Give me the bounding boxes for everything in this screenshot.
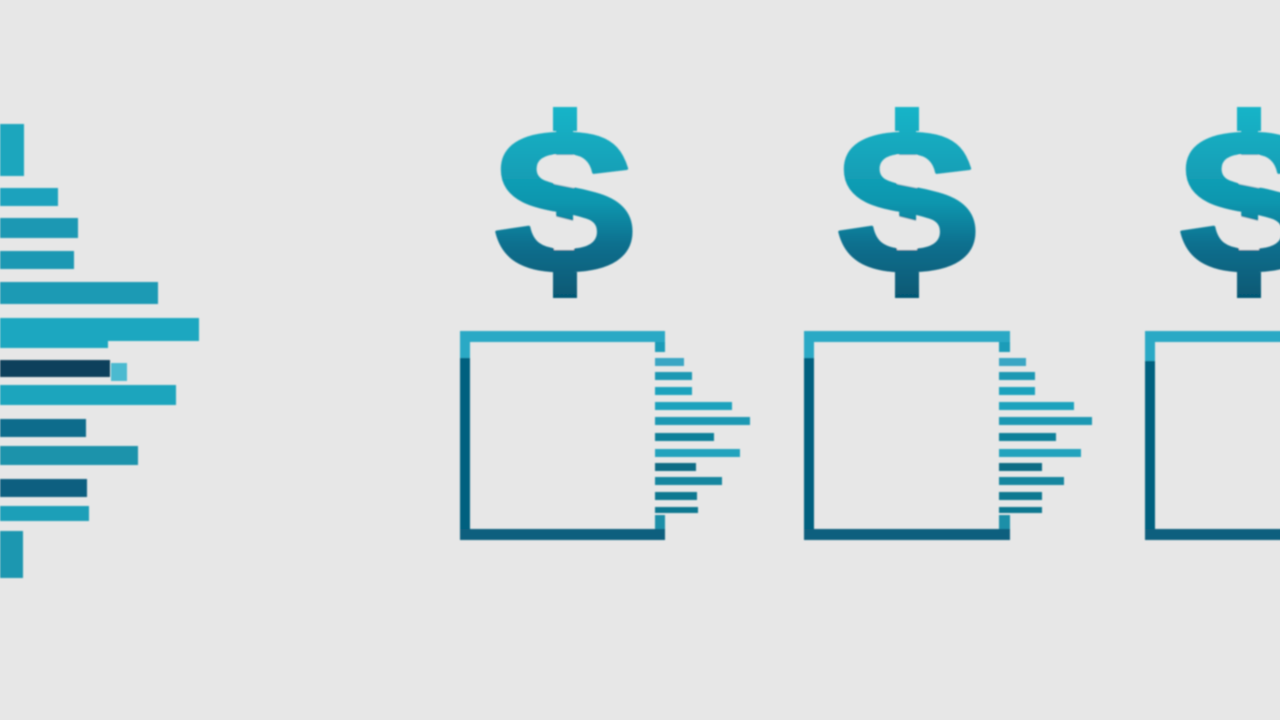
dollar sign 2: $ xyxy=(837,86,977,317)
box 3, cropped at right edge xyxy=(1145,331,1280,540)
box with bars 2 xyxy=(804,331,1092,540)
box with bars 1 xyxy=(460,331,750,540)
cropped enlarged box edge with bars xyxy=(0,124,199,578)
dollar sign 1: $ xyxy=(494,86,634,317)
